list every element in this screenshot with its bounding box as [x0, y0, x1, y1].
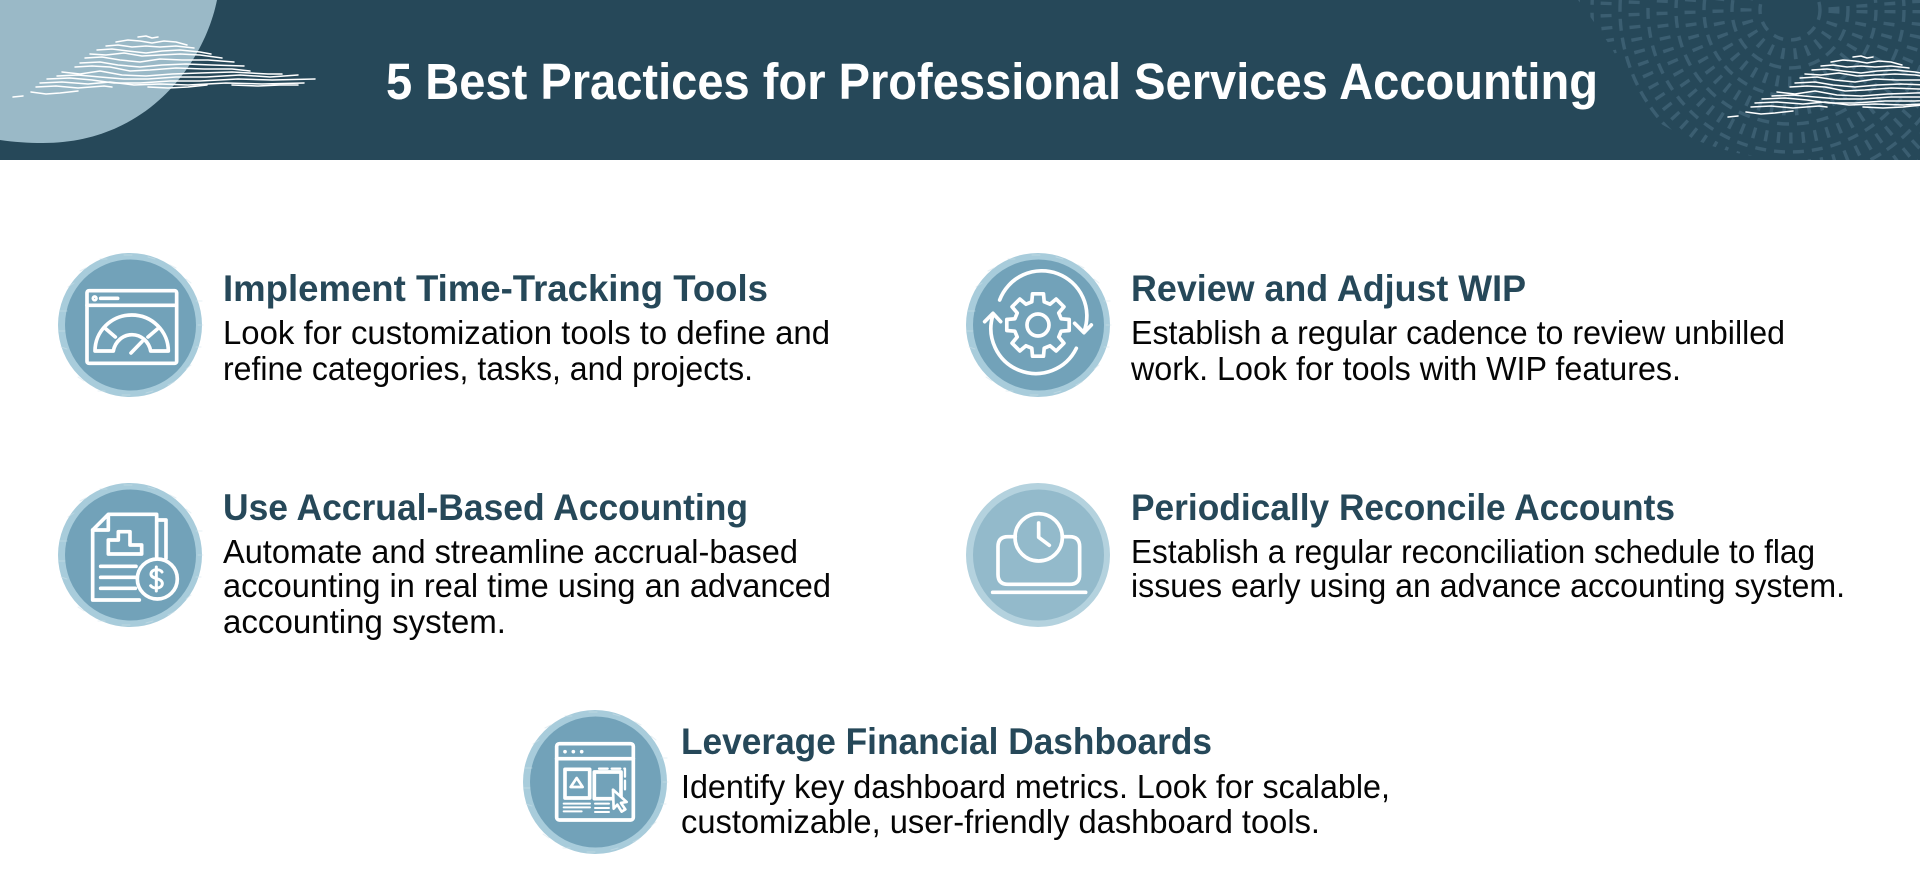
- description: [223, 314, 830, 387]
- icon: laptop with clock: [966, 483, 1110, 627]
- heading: Leverage Financial Dashboards: [681, 721, 1212, 762]
- description: accounting system.: [223, 603, 506, 640]
- heading: Periodically Reconcile Accounts: [1131, 487, 1675, 528]
- description: accounting in real time using an advanced: [223, 567, 831, 604]
- icon: gear cycle: [966, 253, 1111, 397]
- description: Establish a regular cadence to review unbilled: [1131, 314, 1785, 351]
- description: Automate and streamline accrual-based: [223, 533, 798, 570]
- item: Periodically Reconcile Accounts: [966, 483, 1845, 627]
- heading: Review and Adjust WIP: [1131, 268, 1526, 309]
- left brush-stroke mountain: [13, 36, 315, 97]
- description: refine categories, tasks, and projects.: [223, 350, 753, 387]
- description: [681, 768, 1390, 840]
- description: [223, 533, 831, 640]
- left light blob: [0, 0, 217, 143]
- heading: Use Accrual-Based Accounting: [223, 487, 748, 528]
- right brush-stroke mountain: [1728, 56, 1920, 117]
- heading: Implement Time-Tracking Tools: [223, 268, 768, 309]
- description: Establish a regular reconciliation schedule to flag: [1131, 533, 1815, 570]
- item: Review and Adjust WIP: [966, 253, 1785, 397]
- description: work. Look for tools with WIP features.: [1130, 350, 1681, 387]
- right rice-grain texture: [1578, 0, 1920, 160]
- header band: [0, 0, 1920, 160]
- item: Implement Time-Tracking Tools: [58, 253, 830, 397]
- description: Look for customization tools to define and: [223, 314, 830, 351]
- item: Use Accrual-Based Accounting: [58, 483, 831, 640]
- icon: web gauge: [58, 253, 203, 397]
- description: [1130, 314, 1785, 387]
- description: [1131, 533, 1845, 604]
- description: issues early using an advance accounting system.: [1131, 567, 1845, 604]
- icon: financial document: [58, 483, 203, 627]
- description: Identify key dashboard metrics. Look for scalable,: [681, 768, 1390, 805]
- item: Leverage Financial Dashboards: [523, 710, 1390, 854]
- icon: dashboard window: [523, 710, 668, 854]
- description: customizable, user-friendly dashboard tools.: [681, 803, 1320, 840]
- title: 5 Best Practices for Professional Services Accounting: [386, 53, 1598, 110]
